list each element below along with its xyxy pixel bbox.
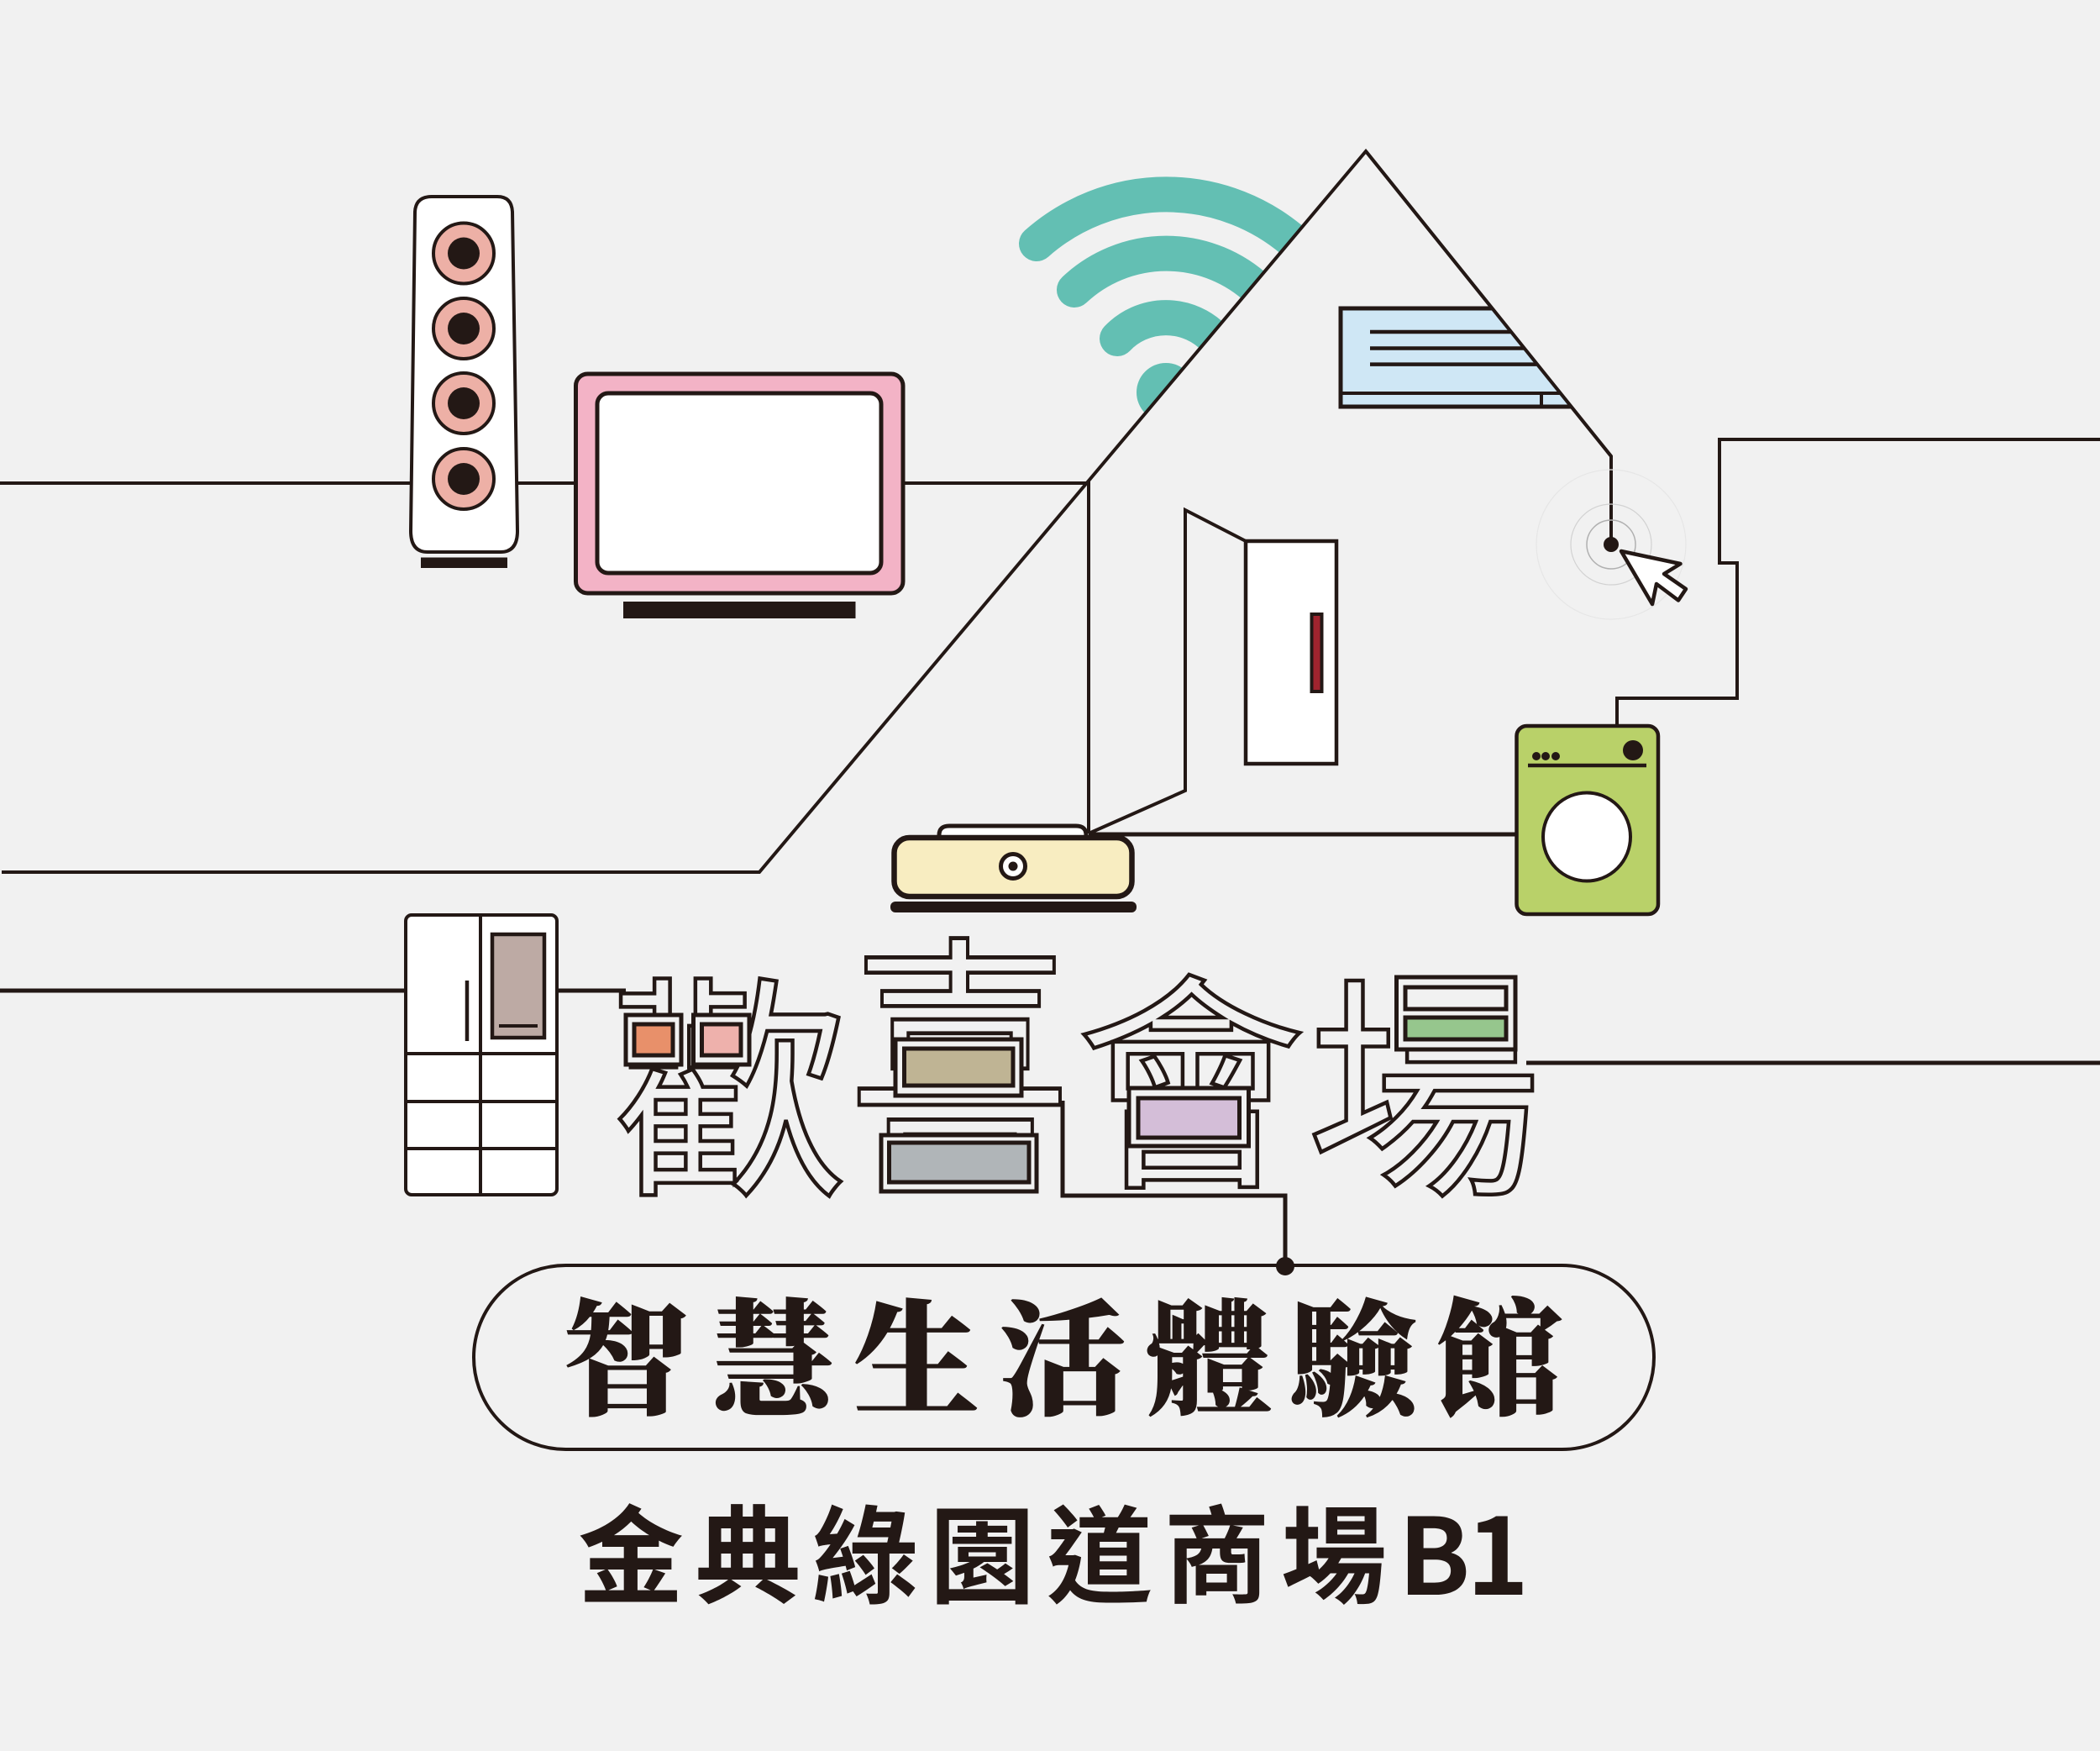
icon: door [1246,541,1336,764]
icon: refrigerator [406,915,557,1195]
icon: touch signal and cursor [1536,470,1686,619]
title windows: coloured rooms set in the lettering [626,977,1515,1191]
title: 歡喜會場 outlined lettering: 喜 [848,922,1071,1220]
title: 歡喜會場 outlined lettering: 歡 [612,965,848,1227]
title: 歡喜會場 outlined lettering: 會 [1075,961,1306,1219]
icon: speaker [411,197,517,568]
icon: television [576,374,903,618]
text: location 金典綠園道商場B1: 金典綠園道商場B1 [578,1473,1541,1626]
title: 歡喜會場 outlined lettering [612,922,1541,1227]
title: 歡喜會場 outlined lettering: 場 [1306,965,1541,1227]
heading: 智慧生活體驗館: 智慧生活體驗館 [563,1293,1582,1433]
panel: subtitle pill [474,1257,1654,1449]
icon: wifi signal [1037,194,1296,422]
icon: robot vacuum [890,826,1137,912]
icon: washing machine [1517,726,1658,914]
icon: air conditioner [1341,151,1611,456]
wiring: house outline and connecting lines [0,151,2100,1266]
